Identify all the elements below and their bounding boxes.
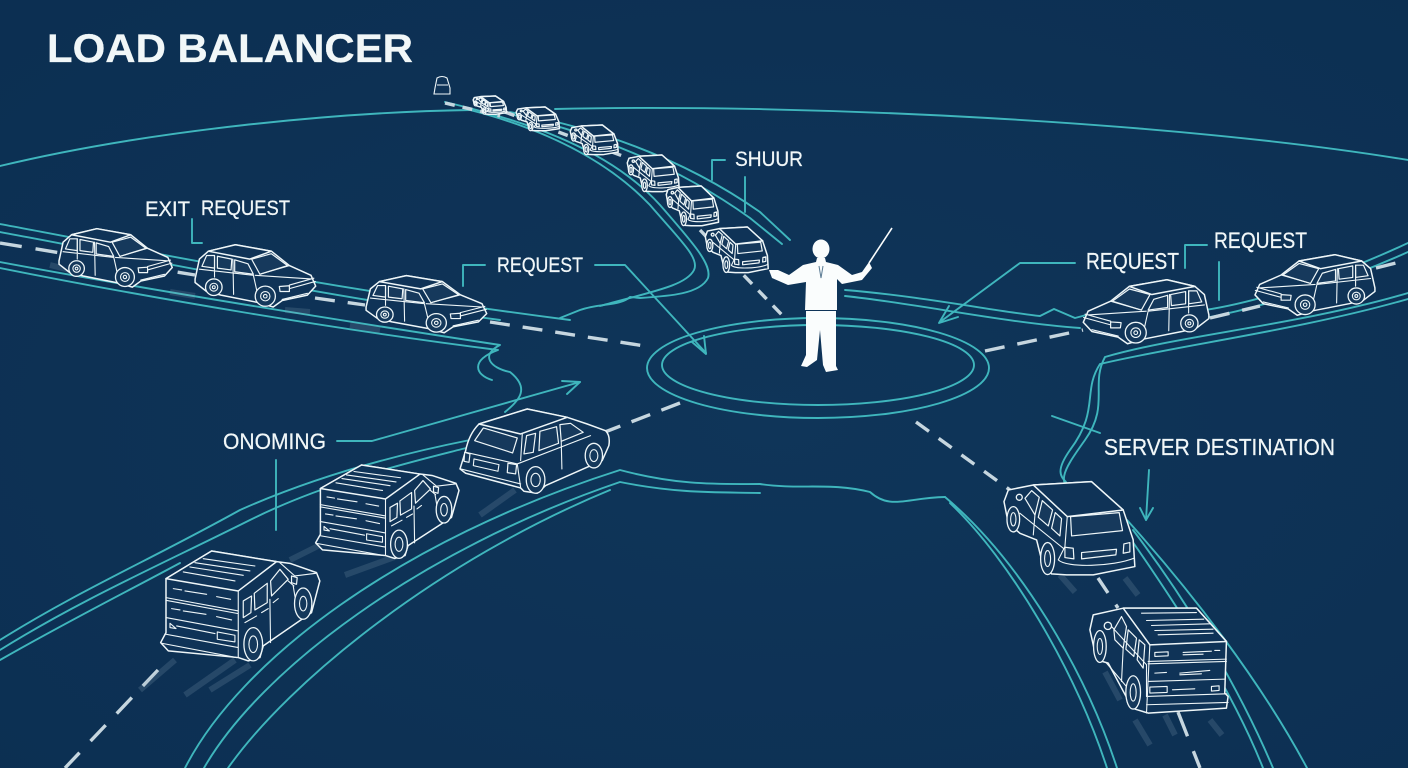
road: lower-right road edges	[945, 497, 1307, 768]
cars: top road queue	[434, 76, 768, 273]
label: oncoming: ONOMING	[223, 429, 326, 454]
cars: lower-right road	[1004, 482, 1228, 713]
label: request left: REQUEST	[497, 254, 583, 277]
road: top incoming road edges	[445, 102, 790, 318]
road: lower centre curve	[185, 470, 945, 768]
cars: lower-left road	[161, 409, 609, 661]
body	[769, 258, 872, 310]
label: shuur: SHUUR	[735, 148, 803, 171]
label: request top left: REQUEST	[201, 197, 290, 220]
cars: left incoming road	[59, 229, 487, 333]
baton	[869, 228, 892, 263]
leader lines and arrows	[192, 160, 1219, 530]
label: exit: EXIT	[145, 198, 190, 221]
cars: right incoming road	[1083, 255, 1375, 344]
label: request right: REQUEST	[1086, 248, 1179, 274]
conductor figure	[769, 228, 892, 372]
road: right incoming road edges	[845, 243, 1408, 500]
horizon arcs	[0, 108, 1408, 166]
title: LOAD BALANCER	[47, 27, 413, 71]
road: lower-left road upper edges	[0, 440, 470, 660]
label: server destination: SERVER DESTINATION	[1104, 434, 1335, 460]
tyre streaks	[50, 265, 1222, 745]
road: left incoming road edges	[0, 224, 570, 412]
head	[812, 240, 830, 258]
roundabout	[647, 318, 989, 418]
label: request far right: REQUEST	[1214, 228, 1307, 253]
legs	[801, 311, 838, 372]
